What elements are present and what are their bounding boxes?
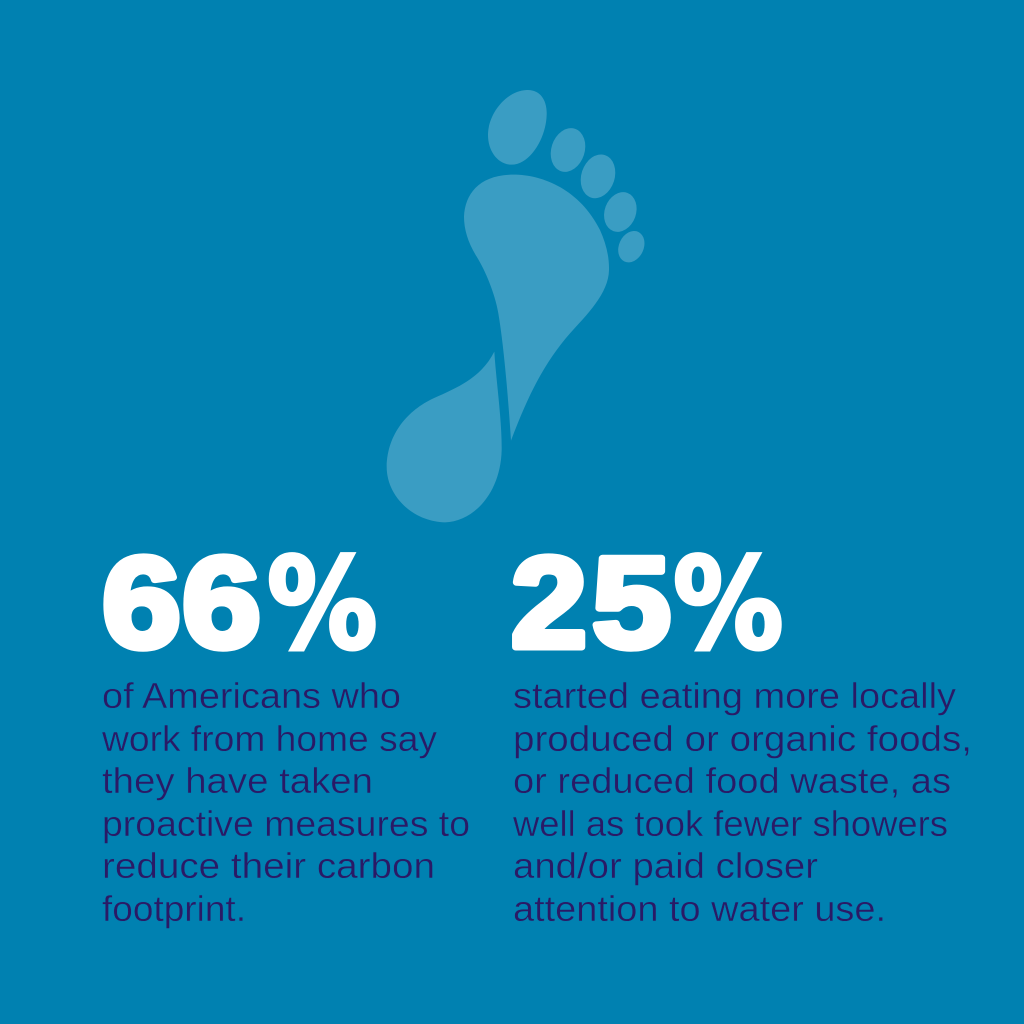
big toe — [488, 90, 547, 165]
sole — [464, 175, 609, 441]
text: 25% description: or reduced food waste, as — [513, 760, 951, 801]
stat: 25%: % — [673, 530, 783, 677]
stat: 25% — [511, 530, 783, 677]
text: 66% description — [101, 675, 470, 929]
fourth toe — [599, 188, 642, 236]
text: 25% description: and/or paid closer — [513, 845, 818, 886]
text: 66% description: reduce their carbon — [102, 845, 435, 886]
text: 66% description: proactive measures to — [102, 803, 470, 844]
text: 25% description: attention to water use. — [513, 888, 886, 929]
text: 25% description — [512, 675, 972, 929]
third toe — [575, 150, 621, 203]
stat: 66%: 6 — [102, 530, 181, 675]
text: 25% description: started eating more locally — [513, 675, 956, 716]
stat: 66%: % — [267, 530, 377, 677]
water drop heel — [387, 352, 502, 522]
text: 25% description: well as took fewer showers — [512, 803, 948, 844]
second toe — [545, 124, 591, 176]
stat: 25%: 2 — [511, 532, 587, 675]
text: 66% description: footprint. — [102, 888, 246, 929]
text: 66% description: they have taken — [102, 760, 373, 801]
text: 66% description: work from home say — [101, 718, 437, 759]
stat: 25%: 5 — [592, 530, 671, 675]
text: 25% description: produced or organic foods, — [513, 718, 972, 759]
stat: 66% — [102, 530, 377, 677]
stat: 66%: 6 — [182, 530, 261, 675]
text: 66% description: of Americans who — [102, 675, 401, 716]
little toe — [613, 227, 649, 267]
icon: footprint with water drop heel — [387, 90, 649, 522]
